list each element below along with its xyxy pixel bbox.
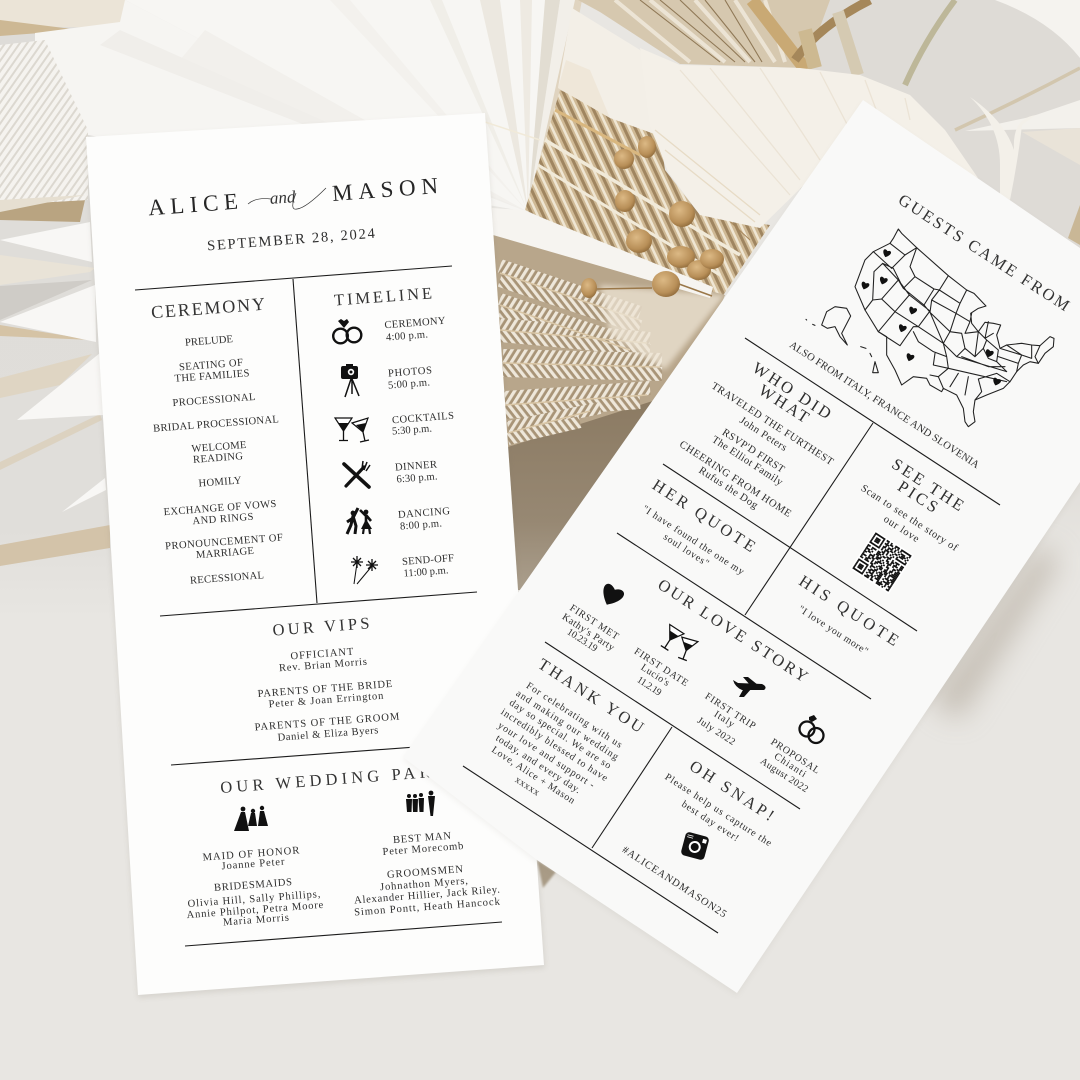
vip names: PARENTS OF THE BRIDE	[257, 679, 393, 700]
heading: who did what: WHO DID	[749, 358, 835, 423]
ceremony list: WELCOME	[191, 440, 247, 455]
heading: oh snap: OH SNAP!	[686, 756, 778, 825]
ceremony list: PRELUDE	[185, 334, 233, 349]
caption: also from: ALSO FROM ITALY, FRANCE AND SLOVENIA	[787, 340, 981, 471]
icon: cocktail glasses	[335, 418, 369, 442]
story milestones: FIRST DATE	[632, 646, 690, 689]
timeline entries: CEREMONY	[384, 316, 446, 331]
story milestones: Italy	[712, 709, 736, 730]
ceremony list: HOMILY	[198, 475, 242, 490]
background: white textured leaf	[558, 8, 662, 136]
icon: dancing couple	[347, 508, 372, 534]
ceremony list: SEATING OF	[179, 358, 243, 373]
heading: who did what: WHAT	[755, 380, 813, 427]
heading: his quote: HIS QUOTE	[796, 571, 902, 650]
timeline entries: 11:00 p.m.	[403, 565, 449, 580]
story milestones: 10.23.19	[565, 627, 599, 654]
heading: vips: OUR VIPS	[272, 613, 370, 640]
panel: our vips	[254, 613, 400, 744]
panel: timeline	[333, 283, 454, 584]
background: tan palm fan	[578, 0, 870, 75]
vip names: Peter & Joan Errington	[268, 691, 384, 710]
heading: thank you: THANK YOU	[535, 654, 647, 737]
ceremony list: EXCHANGE OF VOWS	[163, 499, 277, 518]
icon: cocktail glasses	[657, 624, 699, 662]
who did what entries: TRAVELED THE FURTHEST	[709, 381, 835, 468]
panel: who did what	[677, 358, 835, 520]
thank you message: today, and every day.	[493, 733, 583, 796]
background: white stem bar	[492, 208, 713, 298]
heading: guests: GUESTS CAME FROM	[895, 190, 1073, 315]
caption: scan: our love	[881, 514, 921, 545]
timeline entries: DINNER	[395, 459, 438, 474]
icon: airplane	[733, 677, 766, 697]
thank you message: Love, Alice + Mason	[489, 744, 577, 807]
ceremony list: PROCESSIONAL	[172, 392, 256, 409]
background: seed pods	[581, 136, 724, 298]
map: alaska and hawaii	[806, 307, 878, 373]
heading: timeline: TIMELINE	[333, 283, 433, 310]
background: cream palm fan	[640, 48, 978, 228]
background: top right stems and wisps	[905, 0, 1080, 245]
background: dried brown stems	[485, 90, 770, 300]
timeline entries: 6:30 p.m.	[396, 471, 438, 486]
panel: left program card	[86, 113, 545, 998]
bridal party names: Maria Morris	[223, 913, 289, 928]
icon: wedding rings	[800, 715, 824, 743]
groom party names: Alexander Hillier, Jack Riley.	[354, 885, 500, 906]
ceremony list: BRIDAL PROCESSIONAL	[153, 414, 279, 435]
story milestones: July 2022	[695, 715, 737, 748]
groom party names: GROOMSMEN	[387, 864, 464, 881]
icon: heart	[597, 582, 626, 610]
vip names	[254, 647, 400, 744]
hashtag: #ALICEANDMASON25	[620, 845, 728, 920]
groom party names: Johnathon Myers,	[380, 876, 468, 893]
ceremony list: AND RINGS	[192, 512, 254, 527]
divider lines	[463, 338, 1000, 933]
groom party names: Peter Morecomb	[382, 841, 464, 858]
story milestones: Lucio's	[639, 662, 672, 689]
groom party names	[354, 831, 501, 918]
icon: bride and bridesmaids	[234, 806, 268, 831]
vip names: Daniel & Eliza Byers	[277, 725, 379, 744]
panel: her quote	[640, 475, 759, 578]
story milestones: Chianti	[772, 751, 808, 780]
who did what entries: CHEERING FROM HOME	[677, 439, 793, 520]
background: white fern left	[0, 40, 88, 212]
ceremony list: THE FAMILIES	[174, 368, 250, 385]
quote text: "I love you more"	[796, 604, 870, 657]
who did what entries	[677, 381, 835, 520]
timeline entries: DANCING	[398, 506, 451, 521]
thank you message	[489, 680, 624, 807]
timeline entries: COCKTAILS	[392, 411, 454, 426]
instructions: best day ever!	[679, 799, 741, 844]
bridal party names	[186, 845, 324, 928]
caption: scan: Scan to see the story of	[859, 483, 960, 554]
vip names: Rev. Brian Morris	[279, 657, 367, 674]
icon: camera on tripod	[341, 364, 359, 397]
who did what entries: The Elliot Family	[710, 434, 785, 489]
background: shadows near cards	[505, 395, 1060, 888]
panel: wedding party	[186, 760, 501, 928]
who did what entries: John Peters	[737, 415, 789, 454]
quote text: soul loves"	[661, 532, 711, 569]
panel: thank you	[489, 654, 647, 807]
ceremony list: PRONOUNCEMENT OF	[165, 533, 283, 552]
heading: ceremony: CEREMONY	[150, 294, 266, 322]
title: ALICE	[147, 189, 239, 220]
thank you message: For celebrating with us	[524, 680, 624, 751]
map hearts	[860, 249, 1002, 387]
ceremony list: RECESSIONAL	[190, 570, 264, 587]
story milestones	[560, 603, 821, 795]
panel: our love story	[560, 575, 824, 795]
timeline entries	[384, 316, 454, 580]
script and word: and	[269, 187, 296, 208]
icon: wedding rings	[333, 319, 361, 343]
background: tan fern	[492, 208, 725, 447]
bridal party names: Olivia Hill, Sally Phillips,	[187, 889, 321, 910]
bridal party names: Annie Philpot, Petra Moore	[186, 900, 324, 921]
background: left planks and spears	[0, 0, 130, 566]
bridal party names: BRIDESMAIDS	[214, 877, 292, 894]
title	[147, 173, 439, 220]
who did what entries: RSVP'D FIRST	[720, 427, 787, 476]
timeline entries: 4:00 p.m.	[386, 329, 428, 344]
divider lines	[135, 266, 502, 946]
thank you message: your love and support -	[496, 720, 596, 791]
ceremony list: MARRIAGE	[196, 546, 254, 561]
icon: sparklers	[351, 556, 378, 584]
heading: see the pics: PICS	[894, 477, 942, 516]
background: white palm fan	[12, 0, 582, 212]
groom party names: BEST MAN	[393, 831, 452, 846]
story milestones: Kathy's Party	[560, 612, 616, 653]
vip names: PARENTS OF THE GROOM	[254, 712, 400, 733]
script and word	[248, 187, 326, 209]
story milestones: FIRST TRIP	[703, 691, 758, 732]
vip names: OFFICIANT	[290, 647, 354, 662]
panel: guests came from	[787, 190, 1073, 471]
qr code	[850, 530, 914, 594]
quote text: "I have found the one my	[640, 503, 746, 578]
thank you message: and making our wedding	[514, 688, 620, 763]
map: usa states	[855, 229, 1054, 427]
heading: see the pics: SEE THE	[888, 454, 968, 515]
panel: oh snap	[620, 756, 778, 920]
timeline entries: 5:00 p.m.	[388, 377, 430, 392]
groom party names: Simon Pontt, Heath Hancock	[354, 897, 501, 918]
panel: see the pics	[850, 454, 968, 594]
heading: wedding party: OUR WEDDING PARTY	[220, 760, 460, 797]
ceremony list	[153, 334, 283, 587]
thank you message: day so special. We are so	[507, 697, 613, 772]
heading: her quote: HER QUOTE	[649, 475, 759, 556]
who did what entries: Rufus the Dog	[697, 465, 760, 512]
timeline entries: PHOTOS	[388, 365, 432, 380]
timeline entries: SEND-OFF	[402, 553, 454, 568]
thank you message: xxxxx	[513, 775, 541, 798]
bridal party names: MAID OF HONOR	[202, 845, 301, 864]
panel: his quote	[796, 571, 902, 657]
icon: instagram camera	[680, 831, 710, 861]
thank you message: incredibly blessed to have	[499, 707, 610, 784]
instructions: Please help us capture the	[663, 772, 774, 849]
title: MASON	[331, 173, 439, 206]
timeline entries: 5:30 p.m.	[392, 424, 432, 437]
panel: right program card	[403, 100, 1080, 996]
date: SEPTEMBER 28, 2024	[207, 226, 376, 254]
timeline entries: 8:00 p.m.	[400, 518, 442, 533]
background: white spear leaves	[0, 222, 106, 512]
icon: groom and groomsmen	[406, 791, 435, 816]
bridal party names: Joanne Peter	[221, 857, 285, 872]
story milestones: FIRST MET	[568, 603, 620, 642]
icon: knife and fork	[344, 461, 370, 487]
panel: ceremony order	[150, 294, 283, 587]
ceremony list: READING	[193, 451, 244, 466]
heading: love story: OUR LOVE STORY	[654, 575, 812, 686]
story milestones: 11.2.19	[635, 675, 663, 698]
story milestones: August 2022	[758, 756, 810, 795]
story milestones: PROPOSAL	[769, 737, 821, 776]
